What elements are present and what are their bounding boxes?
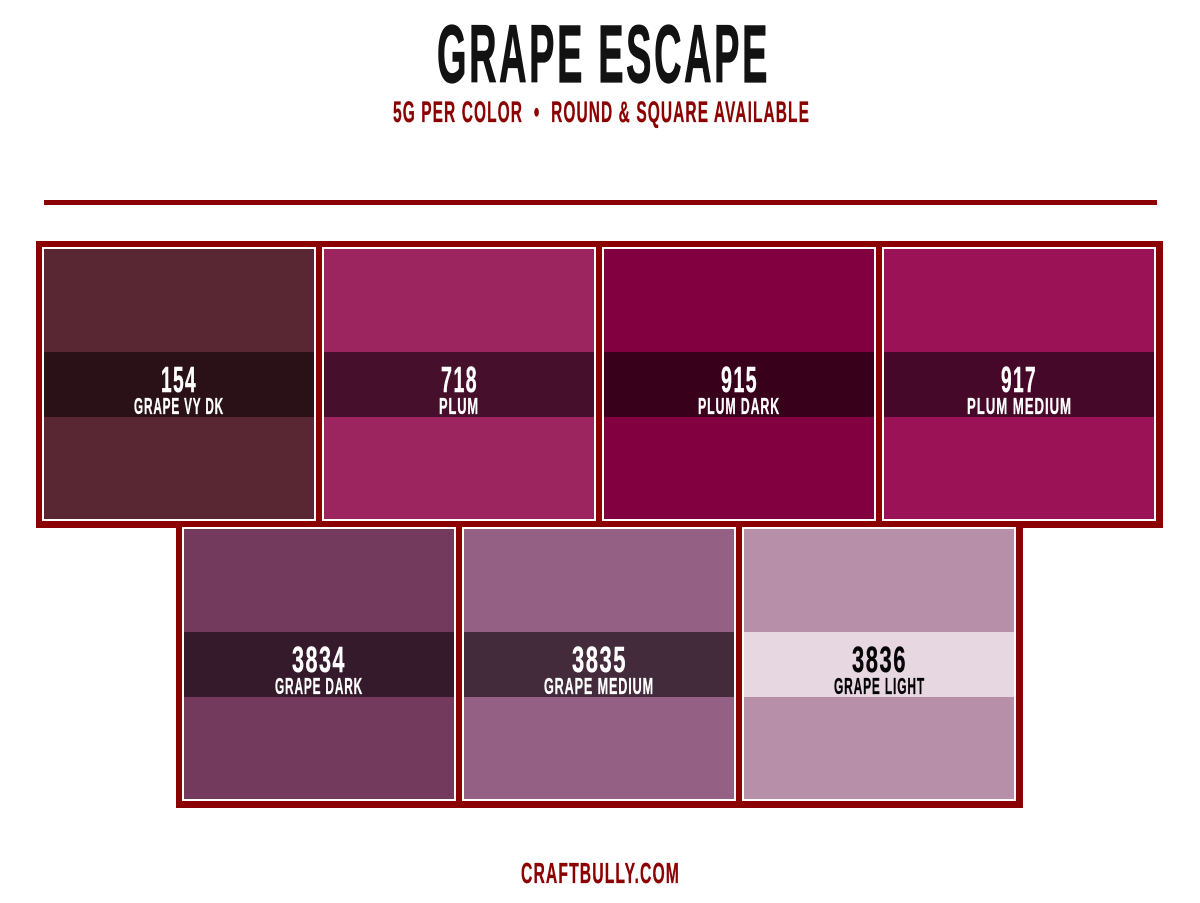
swatch: 3834 Grape Dark: [176, 521, 462, 808]
swatch: 718 Plum: PLUM: [439, 393, 479, 419]
swatch: 915 Plum Dark: [596, 241, 882, 528]
infographic canvas: GRAPE ESCAPE: [437, 9, 770, 100]
swatch: 915 Plum Dark: PLUM DARK: [698, 393, 780, 419]
swatch: 154 Grape Vy Dk: GRAPE VY DK: [134, 393, 224, 419]
swatch: 3836 Grape Light: GRAPE LIGHT: [834, 673, 925, 699]
swatch: 3835 Grape Medium: [456, 521, 742, 808]
swatch: 154 Grape Vy Dk: 154: [161, 359, 197, 400]
swatch: 718 Plum: 718: [441, 359, 478, 400]
swatch: 3834 Grape Dark: 3834: [292, 639, 346, 680]
swatch: 718 Plum: [316, 241, 602, 528]
swatch: 3834 Grape Dark: GRAPE DARK: [275, 673, 363, 699]
subtitle: 5G PER COLOR • ROUND & SQUARE AVAILABLE: [393, 96, 810, 129]
swatch: 917 Plum Medium: PLUM MEDIUM: [967, 393, 1072, 419]
swatch: 3836 Grape Light: [736, 521, 1023, 808]
swatch: 3836 Grape Light: 3836: [852, 639, 907, 680]
swatch: 917 Plum Medium: 917: [1001, 359, 1037, 400]
swatch: 154 Grape Vy Dk: [36, 241, 322, 528]
swatch: 3835 Grape Medium: GRAPE MEDIUM: [544, 673, 654, 699]
swatch: 915 Plum Dark: 915: [721, 359, 758, 400]
footer: website: CRAFTBULLY.COM: [521, 858, 680, 890]
swatch: 917 Plum Medium: [876, 241, 1163, 528]
swatch: 3835 Grape Medium: 3835: [572, 639, 627, 680]
